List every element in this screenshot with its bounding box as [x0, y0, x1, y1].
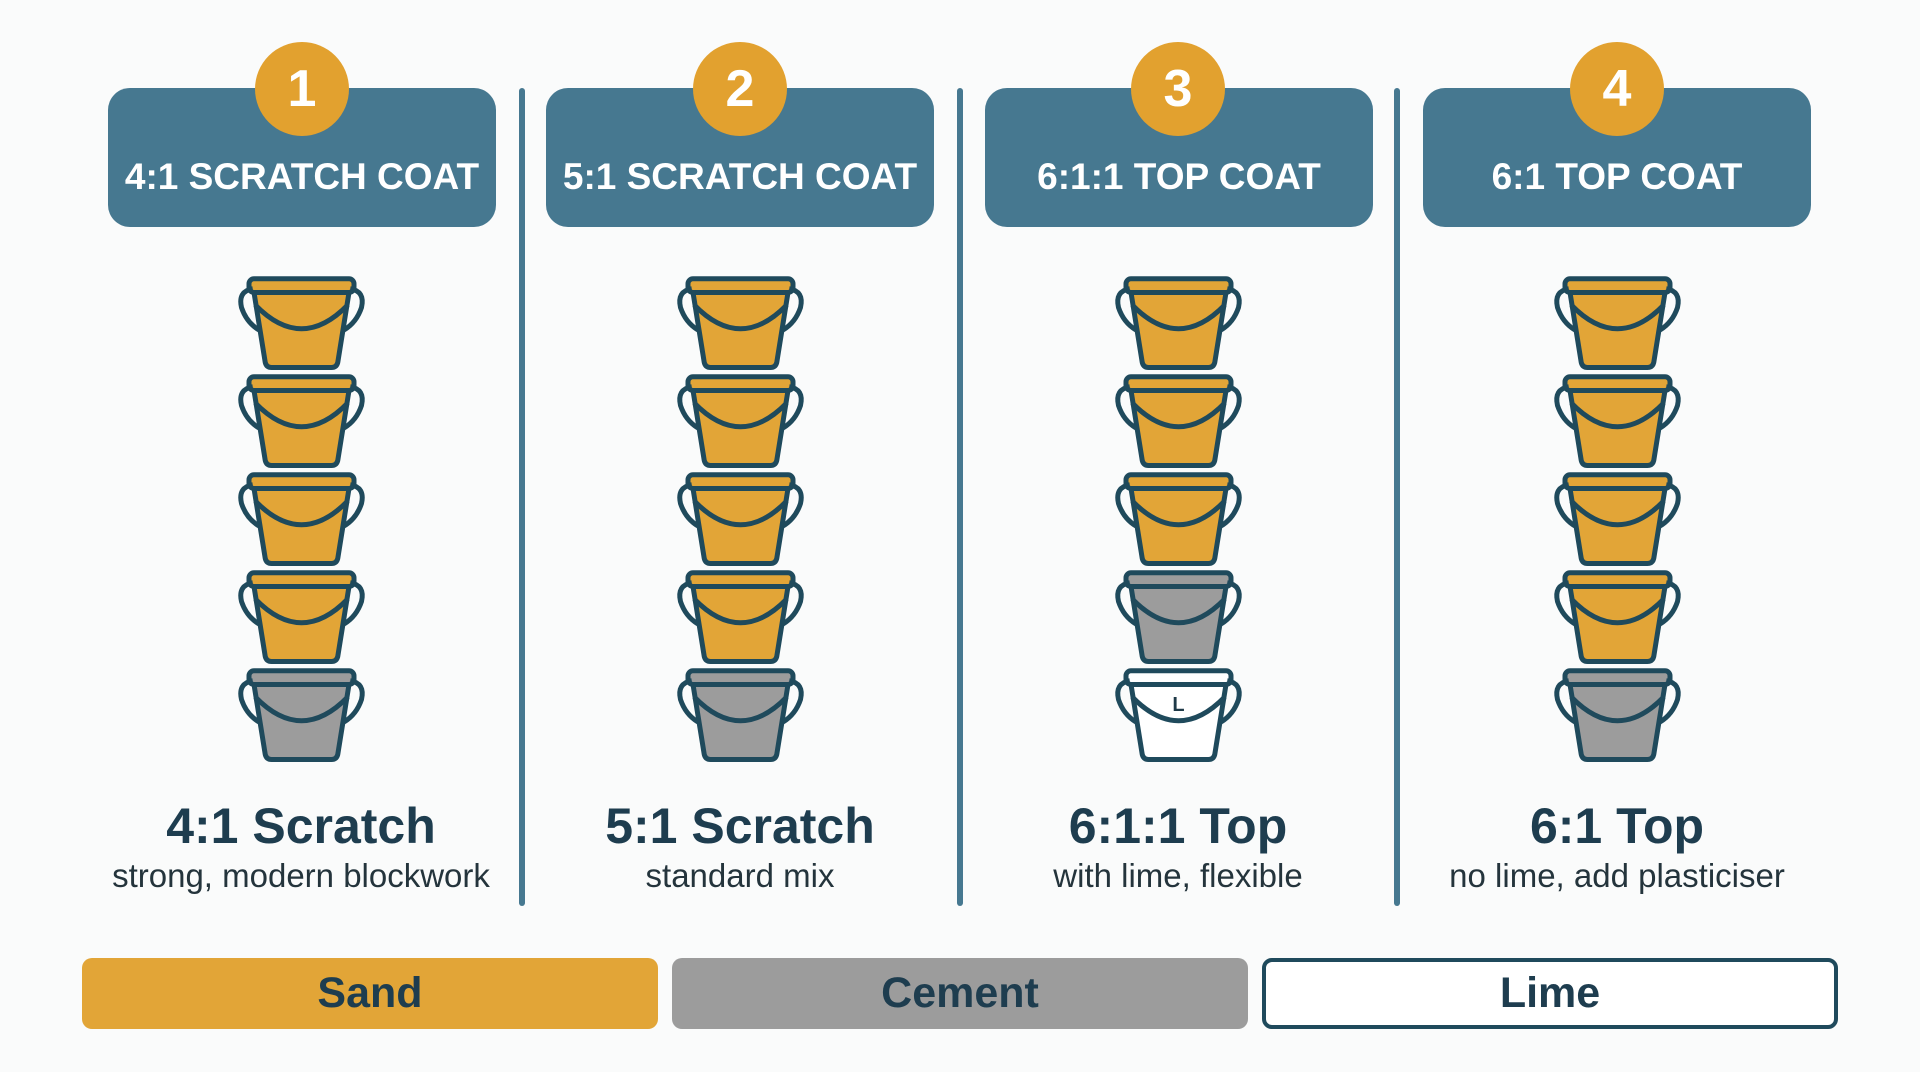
- badge 4: 4: [1603, 60, 1631, 118]
- panel 3 header: 6:1:1 TOP COAT: [1037, 156, 1321, 197]
- bucket stack 2: [677, 276, 804, 762]
- bucket stack 4: [1554, 276, 1681, 762]
- badge 3: 3: [1164, 60, 1192, 118]
- bucket stack 3: L: [1172, 694, 1185, 716]
- badge 2: 2: [726, 60, 754, 118]
- badge 3: [1131, 42, 1225, 136]
- panel 1 header: 4:1 SCRATCH COAT: [125, 156, 479, 197]
- badge 2: [693, 42, 787, 136]
- legend: lime: Lime: [1500, 969, 1600, 1017]
- badge 1: 1: [288, 60, 316, 118]
- caption 3: 6:1:1 Top: [1069, 798, 1287, 854]
- caption 1: [112, 798, 490, 894]
- caption 4: 6:1 Top: [1530, 798, 1704, 854]
- caption 3: [1053, 798, 1303, 894]
- legend: cement: [672, 958, 1248, 1029]
- panel 1 header: [108, 88, 496, 227]
- caption 1: 4:1 Scratch: [166, 798, 436, 854]
- badge 4: [1570, 42, 1664, 136]
- panel 4 header: 6:1 TOP COAT: [1492, 156, 1742, 197]
- legend: cement: Cement: [881, 969, 1039, 1017]
- caption 3: with lime, flexible: [1053, 857, 1303, 894]
- legend: sand: [82, 958, 658, 1029]
- legend: sand: Sand: [317, 969, 423, 1017]
- caption 1: strong, modern blockwork: [112, 857, 490, 894]
- bucket stack 3: [1115, 276, 1242, 762]
- panel 2 header: [546, 88, 934, 227]
- caption 2: [605, 798, 875, 894]
- panel 3 header: [985, 88, 1373, 227]
- badge 1: [255, 42, 349, 136]
- caption 4: [1449, 798, 1785, 894]
- panel 2 header: 5:1 SCRATCH COAT: [563, 156, 917, 197]
- caption 2: 5:1 Scratch: [605, 798, 875, 854]
- panel 4 header: [1423, 88, 1811, 227]
- bucket stack 1: [238, 276, 365, 762]
- legend: lime: [1262, 958, 1838, 1029]
- caption 2: standard mix: [646, 857, 834, 894]
- caption 4: no lime, add plasticiser: [1449, 857, 1785, 894]
